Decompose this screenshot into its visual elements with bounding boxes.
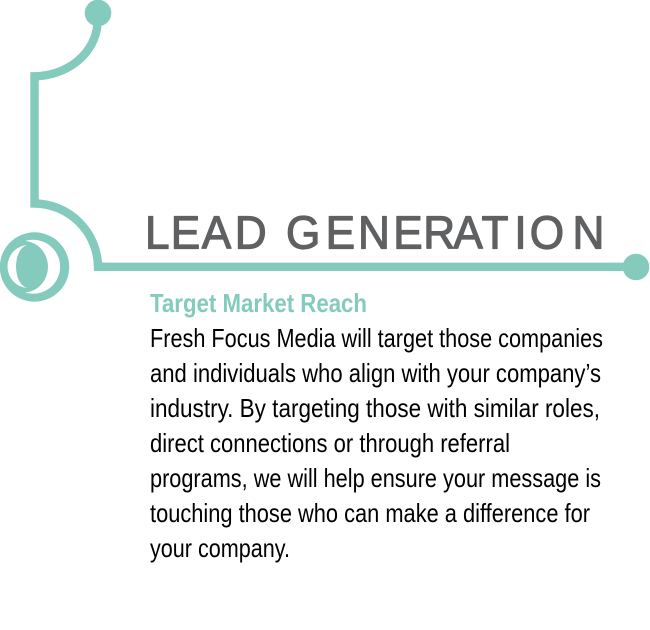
heading: LEAD GENERATION <box>145 206 604 259</box>
connector line: top arc and vertical <box>34 24 636 267</box>
body text: direct connections or through referral <box>150 428 510 458</box>
body text <box>150 323 603 563</box>
icon: top node <box>85 0 111 26</box>
body text: your company. <box>150 533 290 563</box>
icon: right node <box>623 254 649 280</box>
subheading: Target Market Reach <box>150 288 367 318</box>
icon: ring with crescent moon <box>0 232 69 302</box>
